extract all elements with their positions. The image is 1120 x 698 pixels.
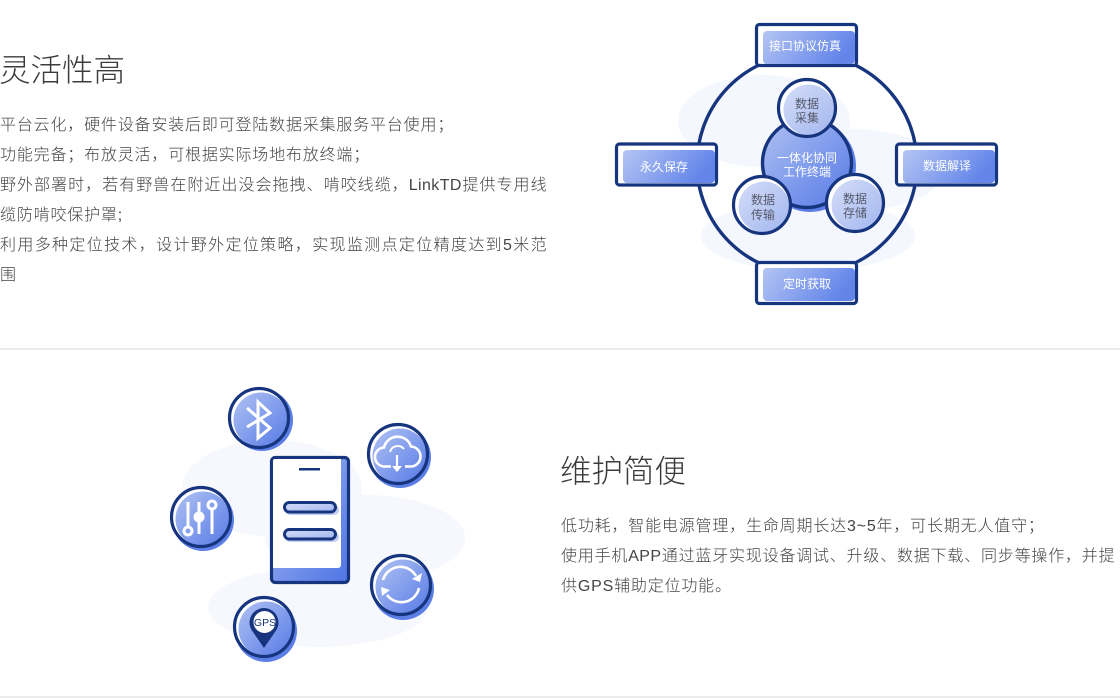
icon: sync	[372, 556, 434, 620]
centre circle: 一体化协同工作终端: 工作终端	[783, 164, 831, 179]
text block: flexibility description: 功能完备；布放灵活，可根据实际场地布放终端；	[0, 147, 370, 164]
text block: maintenance description: 供GPS辅助定位功能。	[561, 578, 732, 595]
circle: 数据传输	[734, 176, 790, 234]
icon: GPS pin: GPS	[254, 617, 276, 629]
text block: flexibility description: 围	[0, 267, 17, 284]
icon: GPS pin	[234, 598, 297, 662]
outer ring	[697, 54, 917, 274]
text block: flexibility description: 利用多种定位技术，设计野外定位策略，实现监测点定位精度达到5米范	[0, 237, 547, 254]
box: 永久保存: 永久保存	[640, 160, 688, 174]
heading: 维护简便: 维护简便	[560, 453, 686, 489]
icon: cloud download	[368, 424, 431, 488]
box: 定时获取: 定时获取	[783, 276, 831, 291]
background blobs	[182, 440, 465, 647]
box: 接口协议仿真	[756, 24, 856, 66]
background blobs	[678, 75, 944, 271]
circle: 数据存储: 数据	[843, 191, 867, 206]
box: 定时获取	[756, 262, 856, 304]
diagram: integrated terminal ring	[616, 24, 996, 304]
text block: flexibility description: 野外部署时，若有野兽在附近出没会拖拽、啃咬线缆，LinkTD提供专用线	[0, 177, 547, 194]
circle: 数据采集: 数据	[795, 96, 819, 111]
text block: flexibility description: 平台云化，硬件设备安装后即可登陆数据采集服务平台使用；	[0, 117, 454, 134]
text block: maintenance description	[561, 517, 1115, 595]
text block: maintenance description: 低功耗，智能电源管理，生命周期长达3~5年，可长期无人值守；	[561, 518, 1045, 535]
circle: 数据传输: 传输	[751, 207, 775, 222]
circle: 数据传输: 数据	[751, 192, 775, 207]
box: 接口协议仿真: 接口协议仿真	[769, 38, 841, 53]
text block: flexibility description	[0, 116, 547, 284]
icon: phone	[272, 458, 348, 582]
diagram: phone with connected functions	[172, 388, 465, 662]
box: 数据解译: 数据解译	[923, 158, 971, 173]
box: 数据解译	[896, 144, 996, 185]
centre circle: 一体化协同工作终端	[762, 118, 856, 212]
icon: bluetooth	[230, 388, 293, 451]
circle: 数据采集	[778, 80, 836, 136]
heading: 灵活性高: 灵活性高	[0, 52, 125, 88]
text block: maintenance description: 使用手机APP通过蓝牙实现设备调试、升级、数据下载、同步等操作，并提	[561, 548, 1115, 565]
circle: 数据存储: 存储	[843, 205, 867, 220]
text block: flexibility description: 缆防啃咬保护罩;	[0, 207, 123, 224]
icon: sliders	[172, 488, 234, 551]
centre circle: 一体化协同工作终端: 一体化协同	[777, 150, 837, 165]
circle: 数据采集: 采集	[795, 110, 819, 125]
circle: 数据存储	[826, 174, 884, 232]
box: 永久保存	[616, 144, 716, 185]
